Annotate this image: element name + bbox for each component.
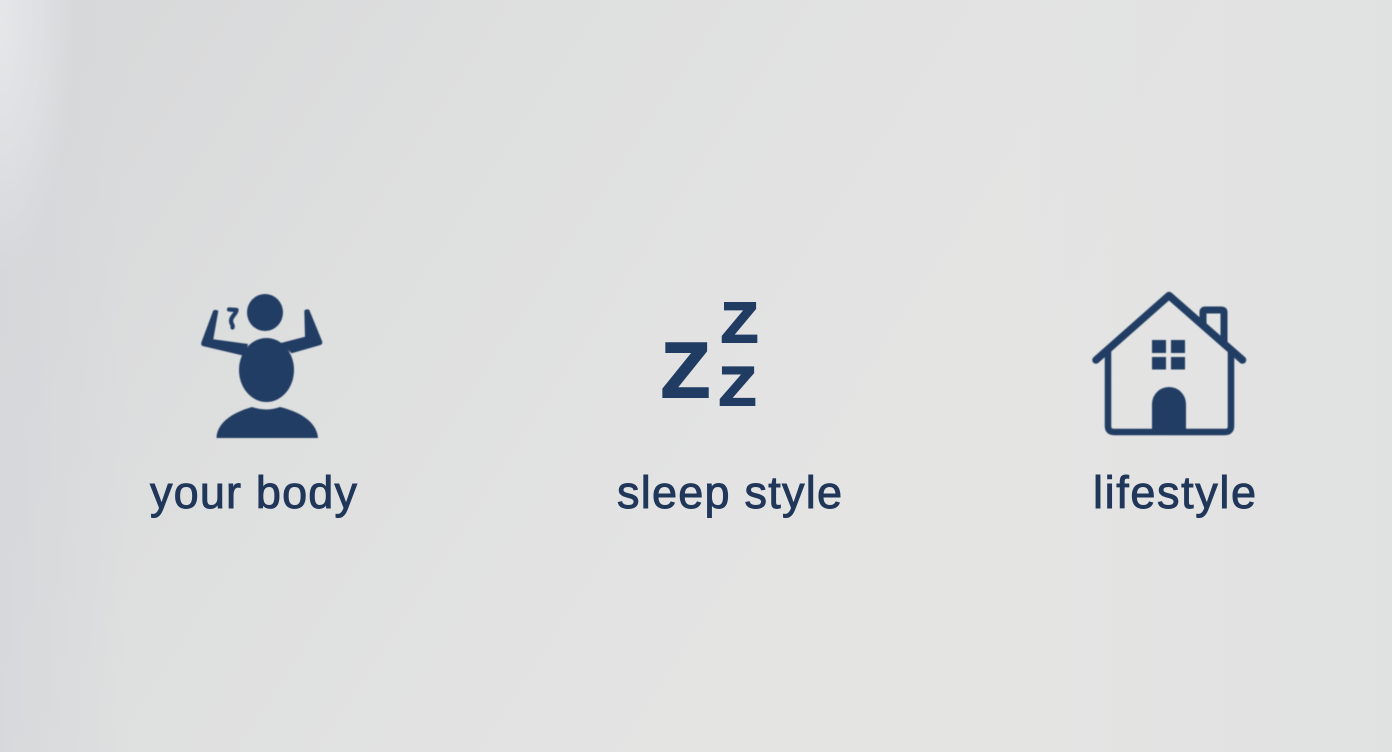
icon: house bbox=[1096, 296, 1242, 432]
label: sleep style: sleep style bbox=[617, 467, 842, 518]
icon: person stretching bbox=[201, 294, 322, 438]
label: lifestyle: lifestyle bbox=[1093, 467, 1256, 518]
icon: sleeping letters: Z bbox=[719, 355, 756, 417]
icon: sleeping letters bbox=[661, 291, 758, 417]
icon: sleeping letters: Z bbox=[721, 291, 758, 355]
panel: sleep style bbox=[617, 291, 842, 518]
icon: sleeping letters: Z bbox=[661, 326, 710, 414]
label: your body: your body bbox=[150, 467, 358, 518]
panel: your body bbox=[150, 294, 358, 518]
panel: lifestyle bbox=[1093, 296, 1256, 518]
